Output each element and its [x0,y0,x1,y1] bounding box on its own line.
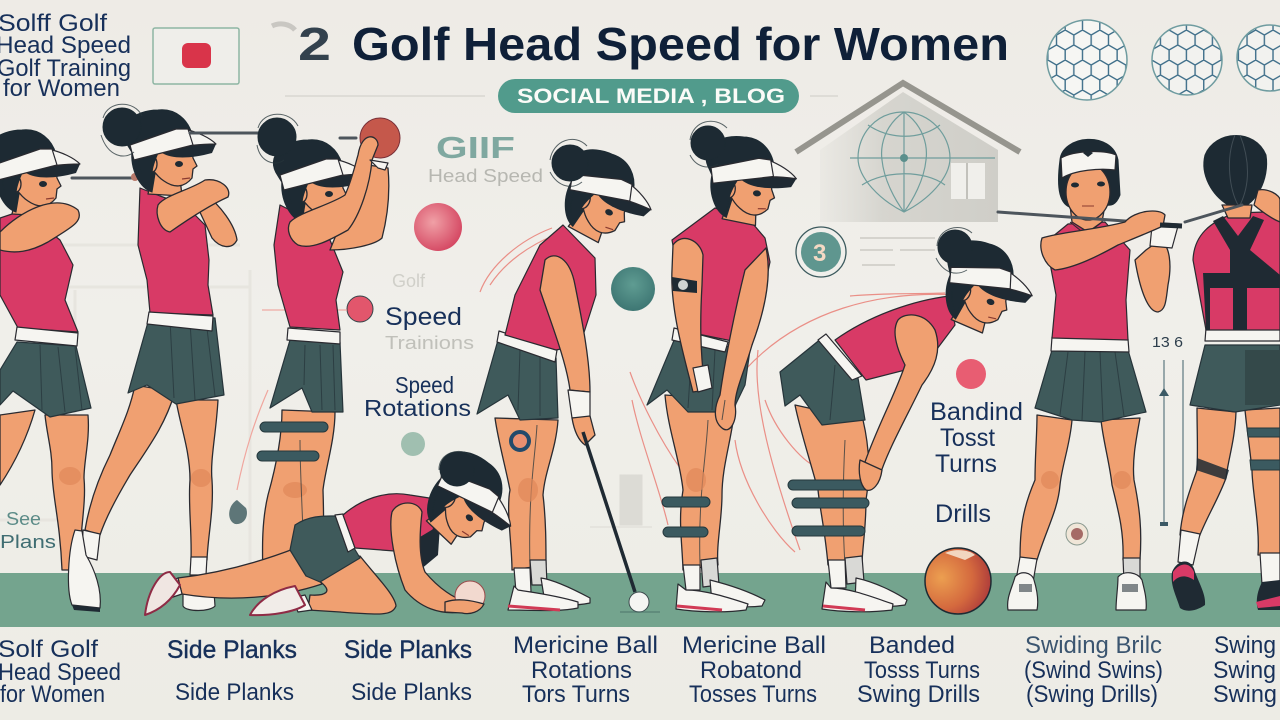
subtitle pill [498,79,799,113]
label column 8: Swing [1213,657,1276,684]
icon: flag [153,28,239,84]
label column 5: Mericine Ball [682,632,826,659]
title: Golf Head Speed for Women [352,18,1009,70]
label column 8: Swing [1214,632,1276,659]
label column 3: Side Planks [351,679,472,706]
text: banded toss turns: Tosst [940,424,995,452]
label column 8 [1213,632,1277,708]
divider lines [285,95,838,97]
label column 3 [344,636,472,706]
faint text lines [860,238,935,265]
label column 1: Head Speed [0,659,121,686]
label column 4: Rotations [531,657,632,684]
figure 3: ball overhead with bands [257,114,400,580]
label column 7: (Swind Swins) [1024,657,1163,684]
golf balls: top right [1047,20,1280,100]
figure 9: kneeling plank with ball [145,441,533,615]
label column 7: Swiding Brilc [1025,632,1162,659]
text: speed trainions: Rotations [364,395,471,421]
label column 1 [0,636,121,708]
motion arcs [237,228,960,552]
text: banded toss turns: Turns [935,450,997,478]
text: speed trainions: Speed [385,303,462,331]
figure 5: standing with bands [647,121,801,612]
text: speed trainions: Trainions [385,333,474,353]
label column 8: Swing [1213,681,1277,708]
figure 8: back view [1172,135,1280,611]
label column 3: Side Planks [344,636,472,664]
text: speed trainions: Speed [395,372,454,398]
top-left heading: Solff Golf [0,10,107,37]
text: see planks: Plans [0,532,56,552]
measure marker [1152,334,1183,526]
label column 6 [857,632,980,708]
flag marker in background [590,475,652,527]
label column 5 [682,632,826,708]
text: speed trainions: Golf [392,271,426,291]
label column 6: Tosss Turns [864,657,980,684]
text: banded toss turns [930,398,1023,528]
ground band [0,573,1280,627]
top-left heading [0,10,131,102]
text: see planks [0,509,56,552]
center-left labels: GIIF [436,130,515,165]
measure marker: 13 6 [1152,334,1183,351]
label column 2 [167,636,297,706]
figure 4: address with club [477,139,666,612]
figure 6: bending with bands [780,227,1044,612]
top-left heading: for Women [3,75,120,102]
label column 6: Swing Drills [857,681,980,708]
decorative balls [262,203,1088,545]
text: banded toss turns: Drills [935,500,991,528]
title: 2 [298,18,331,70]
subtitle pill: SOCIAL MEDIA , BLOG [517,85,785,108]
icon: number disc [796,227,846,277]
label column 4 [513,632,658,708]
label column 1: for Women [0,681,105,708]
ground-level club tip shadow [620,611,660,613]
label column 7 [1024,632,1163,708]
label column 1: Solf Golf [0,636,98,663]
label column 4: Tors Turns [522,681,630,708]
text: banded toss turns: Bandind [930,398,1023,426]
medicine ball [925,548,991,614]
figure 1: standing swing [0,130,139,570]
label column 2: Side Planks [175,679,294,706]
label column 4: Mericine Ball [513,632,658,659]
icon: number disc: 3 [813,240,826,267]
house graphic [796,83,1020,222]
club head [229,500,247,524]
text: see planks: See [6,509,41,529]
label column 5: Tosses Turns [689,681,817,708]
top-left heading: Head Speed [0,32,131,59]
label column 6: Banded [869,632,955,659]
label column 7: (Swing Drills) [1026,681,1158,708]
label column 5: Robatond [700,657,802,684]
figure 7: front view swing [998,139,1182,610]
label column 2: Side Planks [167,636,297,664]
text: speed trainions [364,271,474,421]
top-left heading: Golf Training [0,55,131,82]
figure 2: standing swing [68,104,262,612]
center-left labels: Head Speed [428,166,543,186]
center-left labels [428,130,543,186]
